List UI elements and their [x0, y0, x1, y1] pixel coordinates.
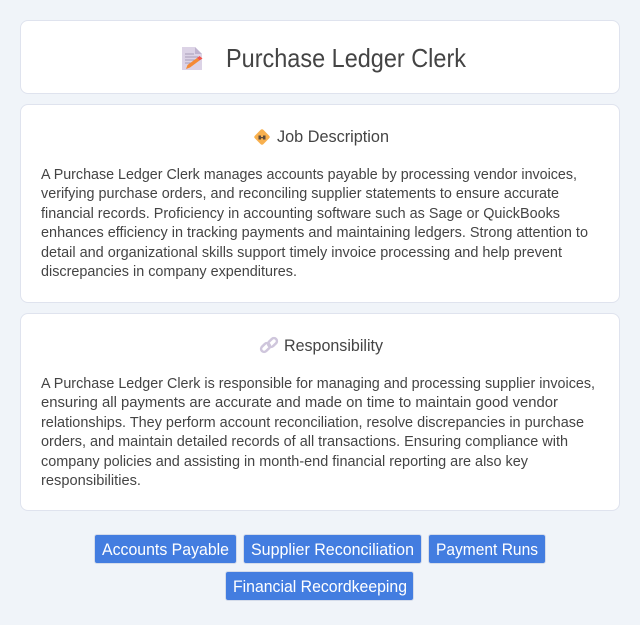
title: Purchase Ledger Clerk	[226, 43, 467, 73]
heading: responsibility: Responsibility	[284, 337, 384, 355]
text block: job description: enhances efficiency in tracking payments and maintaining ledgers. Strong attention to	[41, 225, 588, 241]
text block: responsibility: orders, and maintain detailed records of all transactions. Ensuring compliance with	[41, 434, 568, 450]
text block: job description: verifying purchase orders, and reconciling supplier statements to ensure accurate	[41, 186, 559, 202]
text block: responsibility: relationships. They perform account reconciliation, resolve discrepancies in purchase	[41, 415, 584, 431]
tag: supplier reconciliation: Supplier Reconciliation	[251, 541, 414, 559]
tag: accounts payable: Accounts Payable	[102, 541, 229, 559]
panel: responsibility	[20, 313, 620, 511]
text block: job description: financial records. Proficiency in accounting software such as Sage or QuickBooks	[41, 206, 560, 222]
tag: supplier reconciliation	[243, 534, 422, 564]
text block: responsibility: A Purchase Ledger Clerk is responsible for managing and processing supplier invoices,	[41, 376, 595, 392]
tag: financial recordkeeping	[225, 571, 414, 601]
text block: responsibility: company policies and assisting in month-end financial reporting are also key	[41, 454, 529, 470]
text block: job description: detail and organizational skills support timely invoice processing and help prevent	[41, 245, 562, 261]
text block: responsibility	[41, 376, 595, 489]
panel: title card	[20, 20, 620, 94]
panel: job description	[20, 104, 620, 303]
text block: job description: A Purchase Ledger Clerk manages accounts payable by processing vendor invoices,	[41, 167, 577, 183]
icon: diamond sign	[254, 129, 270, 145]
text block: responsibility: responsibilities.	[41, 473, 141, 489]
heading: job description: Job Description	[277, 128, 389, 146]
text block: job description	[41, 167, 588, 280]
icon: chain link	[260, 336, 278, 354]
tag: accounts payable	[94, 534, 237, 564]
icon: document with pencil	[182, 47, 202, 70]
text block: job description: discrepancies in company expenditures.	[41, 264, 297, 280]
tag: payment runs	[428, 534, 546, 564]
tag: financial recordkeeping: Financial Recordkeeping	[233, 578, 407, 596]
text block: responsibility: ensuring all payments are accurate and made on time to maintain good vendor	[41, 395, 558, 411]
tag: payment runs: Payment Runs	[436, 541, 538, 559]
